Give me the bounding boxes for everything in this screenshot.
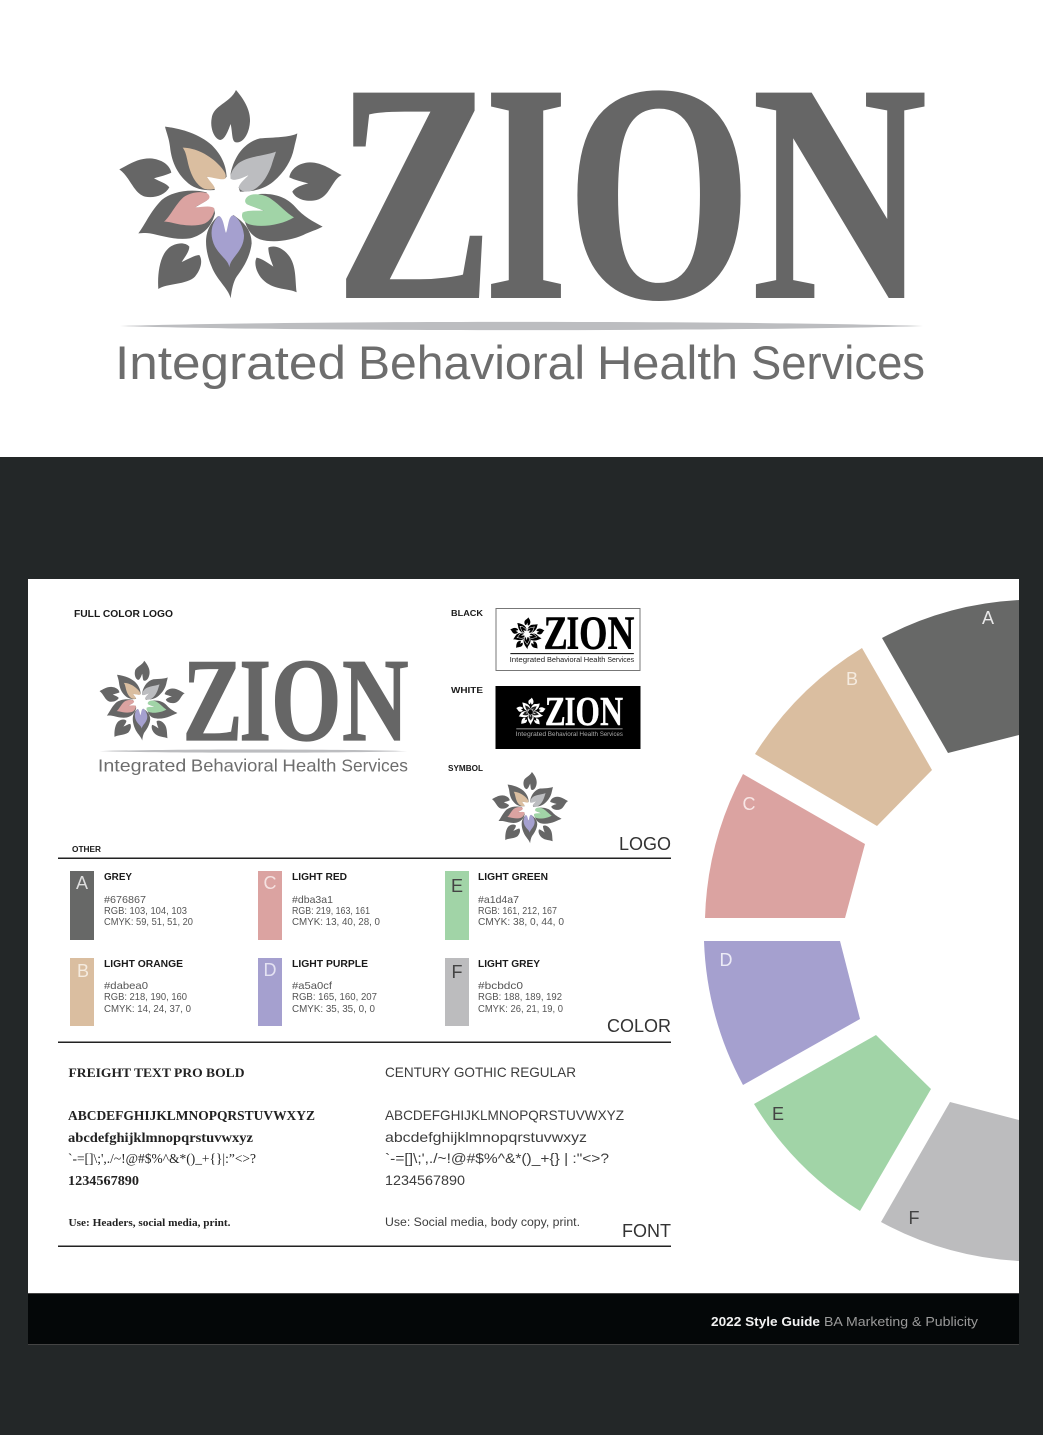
swatch A grey: #676867 [104,894,146,906]
serif font specimen: Use: Headers, social media, print. [68,1218,231,1229]
heading: color: COLOR [607,1016,671,1036]
swatch F light grey: #bcbdc0 [478,980,523,992]
label: white: WHITE [451,685,483,695]
full color logo: Integrated [98,755,186,775]
serif font specimen: abcdefghijklmnopqrstuvwxyz [68,1131,253,1146]
footer credit: BA Marketing & Publicity [824,1314,979,1329]
swatch A grey: GREY [104,872,132,883]
black logo: Integrated [510,655,545,664]
swatch F light grey: F [452,962,462,982]
sans font specimen: 1234567890 [385,1172,465,1188]
main logo [115,22,926,389]
white logo: Z [545,689,566,734]
label: other: OTHER [72,845,101,854]
swatch B light orange: LIGHT ORANGE [104,959,183,970]
swatch C light red: #dba3a1 [292,894,333,906]
dark background [0,457,1043,1435]
black logo: Behavioral [547,655,582,664]
wordmark: ZION: I [485,22,567,364]
white logo: I [565,689,575,734]
swatch F light grey: RGB: 188, 189, 192 [478,991,562,1003]
swatch D light purple: CMYK: 35, 35, 0, 0 [292,1003,375,1015]
wheel segment D: D [720,950,732,970]
full color logo: Behavioral [191,755,278,775]
wheel segment B [755,648,932,826]
black logo: I [566,608,579,660]
swatch D light purple: RGB: 165, 160, 207 [292,991,377,1003]
swatch E light green: RGB: 161, 212, 167 [478,905,557,917]
heading: font: FONT [622,1221,671,1241]
serif font specimen [68,1065,315,1229]
full color logo: Health [282,755,336,775]
wheel segment E [754,1035,931,1211]
wheel segment F [881,1102,1019,1261]
full color logo: O [271,635,341,766]
swatch B light orange: B [77,961,89,981]
white logo: Integrated [516,731,547,738]
swatch E light green: CMYK: 38, 0, 44, 0 [478,916,564,928]
label: full color logo: FULL COLOR LOGO [74,608,173,620]
icon: symbol flower [492,772,568,843]
label: black: BLACK [451,608,484,618]
heading: logo: LOGO [619,834,671,854]
white logo: Health [579,731,599,738]
full color logo: Services [341,755,408,775]
section: logo [58,608,671,859]
section: color [58,871,671,1043]
white logo: O [575,689,600,734]
black logo [496,608,640,670]
swatch D light purple: D [264,960,276,980]
section: font [58,1064,671,1247]
black logo: Z [544,608,568,660]
swatch C light red: LIGHT RED [292,872,347,883]
tagline: Behavioral [358,336,585,389]
full color logo: Z [183,635,243,766]
wheel segment A [882,600,1019,753]
swatch E light green: #a1d4a7 [478,894,519,906]
wordmark: ZION: O [567,22,751,364]
serif font specimen: 1234567890 [68,1174,139,1189]
swatch E light green: E [451,876,463,896]
wheel segment B: B [846,669,858,689]
footer title: 2022 Style Guide [711,1314,820,1329]
swatch E light green [445,871,564,940]
wordmark: ZION [336,22,926,364]
white logo: N [600,689,623,734]
tagline: Services [751,336,925,389]
full color logo [98,635,409,775]
wordmark: ZION: N [752,22,926,364]
tagline: Integrated [115,336,346,389]
swatch F light grey: LIGHT GREY [478,959,540,970]
white logo [496,686,640,749]
swatch A grey: RGB: 103, 104, 103 [104,905,187,917]
full color logo: I [240,635,271,766]
wheel segment D [704,941,860,1085]
wheel segment A: A [982,608,994,628]
swatch C light red: CMYK: 13, 40, 28, 0 [292,916,380,928]
sans font specimen: Use: Social media, body copy, print. [385,1217,580,1229]
panel: style guide card [28,579,1019,1293]
sans font specimen: `-=[]\;',./~!@#$%^&*()_+{} | :"<>? [385,1150,609,1166]
wheel segment C: C [742,794,756,814]
swatch C light red: RGB: 219, 163, 161 [292,905,370,917]
full color logo: N [342,635,409,766]
wheel segment C [705,774,865,918]
serif font specimen: ABCDEFGHIJKLMNOPQRSTUVWXYZ [68,1109,315,1124]
swatch A grey: A [76,873,88,893]
swatch C light red: C [264,873,276,893]
swatch D light purple: #a5a0cf [292,980,332,992]
icon: flower symbol [119,90,342,298]
sans font specimen: CENTURY GOTHIC REGULAR [385,1064,576,1080]
swatch D light purple [258,958,377,1026]
swatch B light orange [70,958,191,1026]
wordmark: ZION: Z [336,22,493,364]
wheel segment F: F [908,1208,920,1228]
white logo: Services [600,731,623,738]
swatch F light grey: CMYK: 26, 21, 19, 0 [478,1003,563,1015]
swoosh divider [120,322,923,330]
sans font specimen: ABCDEFGHIJKLMNOPQRSTUVWXYZ [385,1107,624,1123]
white logo: Behavioral [548,731,578,738]
swatch A grey: CMYK: 59, 51, 51, 20 [104,916,193,928]
swatch E light green: LIGHT GREEN [478,872,548,883]
color wheel [704,600,1019,1261]
swatch C light red [258,871,380,940]
sans font specimen: abcdefghijklmnopqrstuvwxyz [385,1129,587,1145]
tagline [115,336,925,389]
swatch B light orange: CMYK: 14, 24, 37, 0 [104,1003,191,1015]
serif font specimen: FREIGHT TEXT PRO BOLD [68,1065,244,1080]
sans font specimen [385,1064,624,1229]
wheel segment E: E [772,1104,784,1124]
serif font specimen: `-=[]\;',./~!@#$%^&*()_+{}|:”<>? [68,1152,256,1167]
swatch F light grey [445,958,563,1026]
black logo: N [608,608,634,660]
swatch A grey [70,871,193,940]
label: symbol: SYMBOL [448,764,483,773]
black logo: Services [607,655,635,664]
swatch B light orange: RGB: 218, 190, 160 [104,991,187,1003]
black logo: O [579,608,607,660]
swatch B light orange: #dabea0 [104,980,148,992]
footer bar [28,1293,1019,1345]
tagline: Health [597,336,738,389]
black logo: Health [584,655,605,664]
swatch D light purple: LIGHT PURPLE [292,959,368,970]
